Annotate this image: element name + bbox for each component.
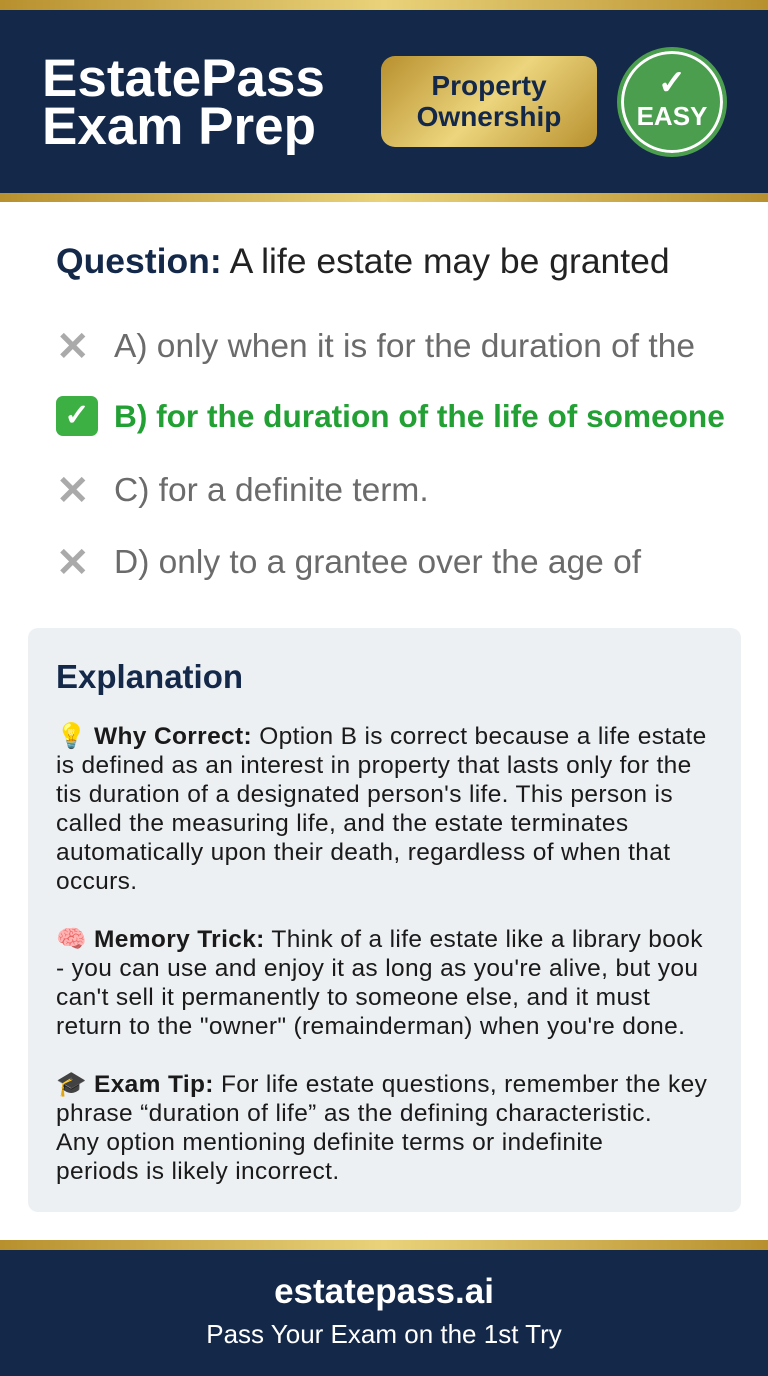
heading: Explanation bbox=[56, 658, 243, 695]
memory trick: can't sell it permanently to someone else, and it must bbox=[56, 984, 650, 1011]
exam tip bbox=[56, 1071, 707, 1185]
exam tip: Any option mentioning definite terms or indefinite bbox=[56, 1129, 603, 1156]
option B (correct): ✓ bbox=[64, 399, 90, 432]
header bbox=[0, 0, 768, 202]
footer url: estatepass.ai bbox=[274, 1272, 494, 1311]
badge: topic bbox=[381, 56, 597, 147]
badge: difficulty: ✓ bbox=[658, 64, 686, 102]
option D: ✕ bbox=[56, 541, 90, 585]
why correct bbox=[56, 722, 707, 895]
why correct: automatically upon their death, regardless of when that bbox=[56, 839, 670, 866]
exam tip: periods is likely incorrect. bbox=[56, 1158, 339, 1185]
memory trick: return to the "owner" (remainderman) when you're done. bbox=[56, 1013, 685, 1040]
badge: difficulty bbox=[617, 47, 727, 157]
why correct: called the measuring life, and the estate terminates bbox=[56, 810, 628, 837]
option B (correct): B) for the duration of the life of someone bbox=[114, 398, 725, 434]
question: Question: A life estate may be granted bbox=[56, 241, 670, 281]
panel: explanation bbox=[28, 628, 741, 1212]
option A: A) only when it is for the duration of the bbox=[114, 328, 695, 365]
memory trick bbox=[56, 926, 703, 1040]
why correct: 💡 Why Correct: Option B is correct because a life estate bbox=[56, 723, 707, 750]
exam tip: 🎓 Exam Tip: For life estate questions, remember the key bbox=[56, 1071, 707, 1098]
badge: difficulty: EASY bbox=[637, 101, 707, 131]
why correct: tis duration of a designated person's life. This person is bbox=[56, 781, 673, 808]
badge: topic: Ownership bbox=[417, 101, 561, 132]
option D: D) only to a grantee over the age of bbox=[114, 544, 641, 581]
why correct: is defined as an interest in property that lasts only for the bbox=[56, 752, 692, 779]
title: Exam Prep bbox=[42, 97, 316, 156]
title: EstatePass bbox=[42, 49, 325, 108]
option C: ✕ bbox=[56, 469, 90, 513]
title bbox=[42, 49, 325, 156]
memory trick: - you can use and enjoy it as long as you're alive, but you bbox=[56, 955, 698, 982]
footer bbox=[0, 1240, 768, 1376]
badge: topic: Property bbox=[431, 70, 547, 101]
why correct: occurs. bbox=[56, 868, 137, 895]
exam tip: phrase “duration of life” as the defining characteristic. bbox=[56, 1100, 652, 1127]
option C: C) for a definite term. bbox=[114, 472, 429, 509]
tagline: Pass Your Exam on the 1st Try bbox=[206, 1319, 562, 1349]
option A: ✕ bbox=[56, 325, 90, 369]
memory trick: 🧠 Memory Trick: Think of a life estate like a library book bbox=[56, 926, 703, 953]
